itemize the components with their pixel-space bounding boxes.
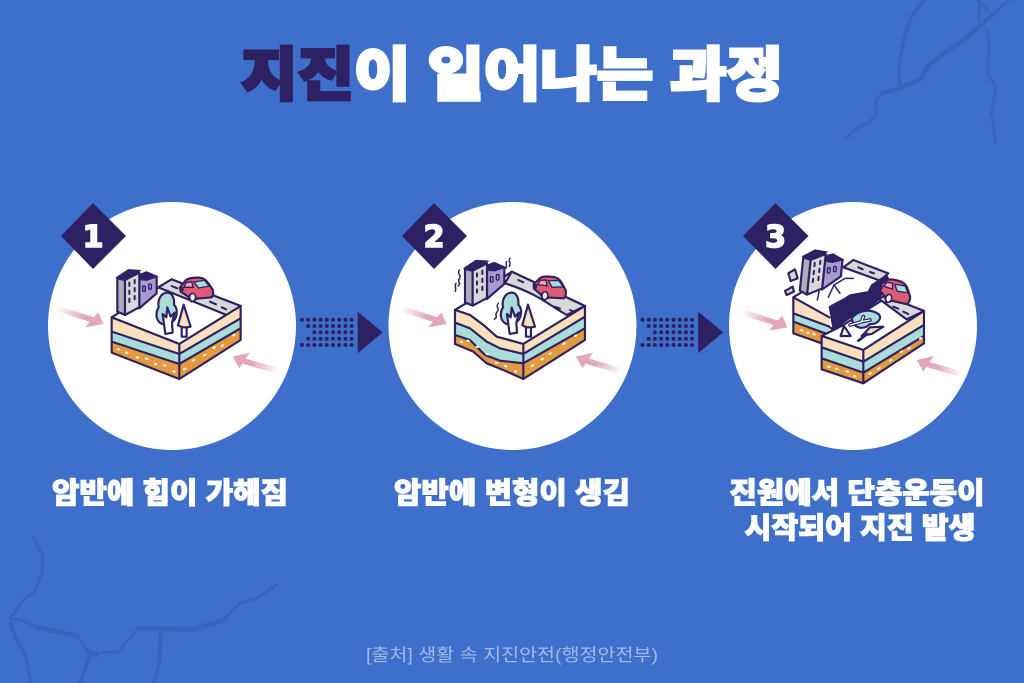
arrow: step 1 to 2 (300, 312, 383, 353)
label: step 3: 진원에서 단층운동이 (730, 477, 984, 510)
label: step 3: 시작되어 지진 발생 (744, 512, 976, 545)
title: 이 일어나는 과정 (354, 43, 783, 108)
badge: step 3: 3 (765, 220, 786, 255)
illustration: step 1 ground block (58, 270, 277, 379)
panel: step 3 circle (729, 202, 977, 450)
panel: step 2 circle (388, 202, 636, 450)
crack: bottom left (10, 537, 277, 683)
crack: top right (846, 0, 1009, 143)
badge: step 3 (743, 203, 808, 269)
badge: step 1: 1 (83, 220, 103, 255)
illustration: step 2 deformed block (402, 258, 620, 379)
badge: step 1 (61, 203, 126, 269)
badge: step 2: 2 (424, 220, 444, 255)
source: [출처] 생활 속 지진안전(행정안전부) (366, 645, 658, 665)
illustration: step 3 faulted block (742, 249, 961, 383)
title: 지진 (241, 43, 354, 108)
badge: step 2 (402, 203, 467, 269)
label: step 2: 암반에 변형이 생김 (394, 477, 630, 510)
arrow: step 2 to 3 (640, 312, 723, 353)
label: step 3 (730, 477, 984, 545)
label: step 1: 암반에 힘이 가해짐 (52, 477, 288, 510)
panel: step 1 circle (48, 202, 296, 450)
